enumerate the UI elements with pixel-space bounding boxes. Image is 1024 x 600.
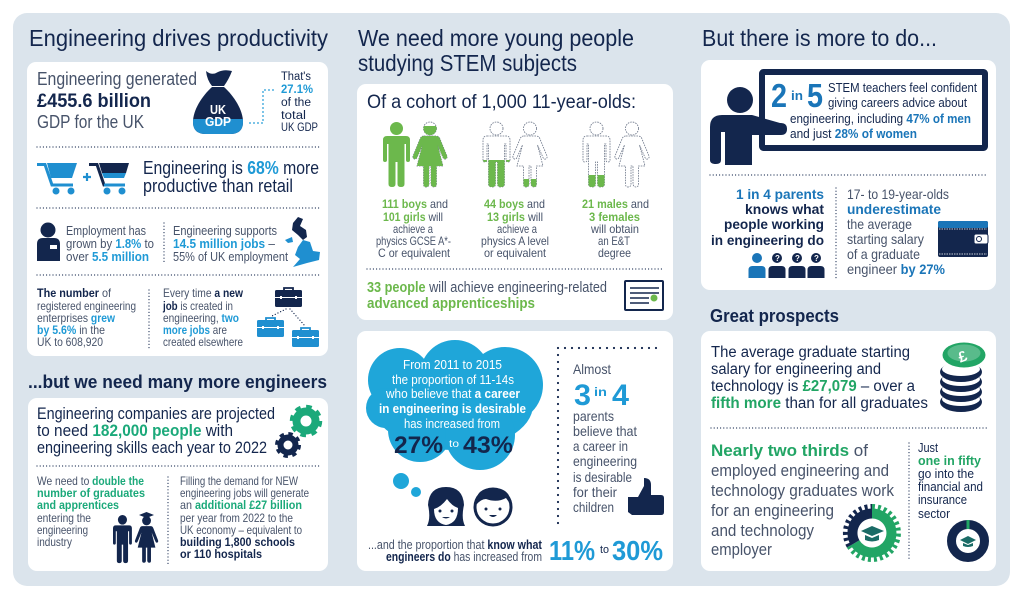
text: jobs supported: 14.5 million jobs – xyxy=(173,236,276,251)
text: 2 in 5 teachers: STEM teachers feel confident xyxy=(828,81,977,95)
icon: girl face xyxy=(427,487,465,526)
text: 1 in 4 parents: knows what xyxy=(745,201,824,217)
icon: coin stack: £ xyxy=(956,347,970,366)
stat: 11% to 30%: 11% xyxy=(549,535,595,566)
icon: four parents: ? xyxy=(814,254,819,263)
text: share of GDP: of the xyxy=(281,97,311,109)
text: cohort heading: Of a cohort of 1,000 11-year-olds: xyxy=(367,91,636,113)
text: registered enterprises xyxy=(37,286,136,349)
icon: boy face xyxy=(475,488,511,525)
text: double graduates xyxy=(37,474,145,549)
text: know what engineers do: engineers do has increased from xyxy=(386,550,542,564)
text: two thirds: technology graduates work xyxy=(711,481,894,500)
text: new jobs multiplier: job is created in xyxy=(162,299,233,313)
text: 3 in 4 parents: 4 xyxy=(612,379,629,412)
text: jobs supported xyxy=(173,223,288,264)
text: 182,000 people: engineering skills each year to 2022 xyxy=(37,438,267,457)
chart: physics GCSE figures xyxy=(383,122,447,187)
chart: physics A level figures xyxy=(483,122,547,187)
chart: degree figures xyxy=(583,122,649,187)
panel: great prospects xyxy=(701,331,996,571)
heading: we need more young people: studying STEM subjects xyxy=(358,50,577,76)
thought cloud: 43% xyxy=(463,432,513,459)
text: new jobs multiplier: created elsewhere xyxy=(163,335,243,349)
text: double graduates: engineering xyxy=(37,523,88,537)
text: 2 in 5 teachers: and just 28% of women xyxy=(790,127,917,141)
chart: gear donut two thirds xyxy=(845,506,898,559)
text: two thirds: employer xyxy=(711,540,772,559)
text: economic value: building 1,800 schools xyxy=(180,535,295,549)
text: share of GDP: total xyxy=(281,110,306,122)
icon: money bag: GDP xyxy=(205,114,231,129)
icon: four parents: ? xyxy=(775,254,780,263)
text: degree stat: an E&T xyxy=(598,234,631,248)
text: apprenticeships: 33 people will achieve engineering-related xyxy=(367,280,607,296)
text: A level stat xyxy=(481,197,549,260)
text: one in fifty: go into the xyxy=(918,467,974,481)
text: share of GDP: That's xyxy=(281,71,311,83)
text: A level stat: 13 girls will xyxy=(487,210,543,224)
text: economic value xyxy=(180,474,309,561)
text: share of GDP: 27.1% xyxy=(281,84,313,96)
icon: money bag xyxy=(193,70,243,134)
text: 3 in 4 parents: engineering xyxy=(573,453,637,469)
thought cloud: 27% xyxy=(394,432,443,459)
text: starting salary: The average graduate starting xyxy=(711,344,910,361)
text: 1 in 4 parents xyxy=(711,186,824,248)
heading: engineering drives productivity: Engineering drives productivity xyxy=(29,25,328,51)
heading: we need more young people: We need more young people xyxy=(358,25,634,51)
text: 2 in 5 teachers: 5 xyxy=(807,77,823,114)
panel: cohort xyxy=(357,84,673,320)
text: one in fifty: insurance xyxy=(918,493,967,507)
icon: shopping carts xyxy=(37,163,129,194)
text: new jobs multiplier: more jobs are xyxy=(163,323,227,337)
text: jobs supported: 55% of UK employment xyxy=(173,249,288,264)
text: 1 in 4 parents: people working xyxy=(724,216,824,232)
text: one in fifty: financial and xyxy=(918,480,983,494)
text: underestimate salary: starting salary xyxy=(847,231,924,247)
text: 2 in 5 teachers: giving careers advice about xyxy=(828,96,967,110)
text: employment growth: over 5.5 million xyxy=(66,249,149,264)
text: GCSE stat xyxy=(376,197,451,260)
text: GCSE stat: C or equivalent xyxy=(378,246,451,260)
text: know what engineers do: ...and the proportion that know what xyxy=(368,538,543,552)
text: 3 in 4 parents: in xyxy=(594,385,607,399)
text: 3 in 4 parents xyxy=(573,361,637,515)
text: economic value: per year from 2022 to the xyxy=(180,511,293,525)
thought cloud xyxy=(366,340,543,497)
thought cloud: who believe that a career xyxy=(385,387,520,401)
text: 3 in 4 parents: a career in xyxy=(573,438,628,454)
text: share of GDP: UK GDP xyxy=(281,122,318,134)
text: new jobs multiplier xyxy=(162,286,244,349)
text: 3 in 4 parents: Almost xyxy=(573,361,611,377)
text: new jobs multiplier: engineering, two xyxy=(163,311,239,325)
text: starting salary: salary for engineering and xyxy=(711,361,881,378)
icon: gears xyxy=(277,407,320,456)
heading: but we need many more engineers: ...but we need many more engineers xyxy=(28,371,327,392)
text: 2 in 5 teachers: 2 xyxy=(771,77,787,114)
text: 3 in 4 parents: believe that xyxy=(573,423,637,439)
text: know what engineers do xyxy=(368,538,543,564)
text: 1 in 4 parents: 1 in 4 parents xyxy=(736,186,824,202)
text: economic value: an additional £27 billion xyxy=(180,498,302,512)
text: registered enterprises: registered engineering xyxy=(37,299,136,313)
panel: productivity xyxy=(27,62,328,356)
text: degree stat: 3 females xyxy=(589,210,640,224)
icon: four parents: ? xyxy=(795,254,800,263)
text: degree stat: degree xyxy=(598,246,631,260)
text: double graduates: entering the xyxy=(37,511,91,525)
text: double graduates: number of graduates xyxy=(37,486,145,500)
text: GDP headline: £455.6 billion xyxy=(37,91,151,112)
text: double graduates: We need to double the xyxy=(37,474,144,488)
icon: four parents xyxy=(748,253,824,278)
text: registered enterprises: by 5.6% in the xyxy=(37,323,105,337)
text: degree stat xyxy=(582,197,649,260)
text: 2 in 5 teachers xyxy=(771,77,977,141)
text: A level stat: or equivalent xyxy=(484,246,547,260)
text: underestimate salary: the average xyxy=(847,216,912,232)
stat: 11% to 30% xyxy=(549,535,663,566)
text: one in fifty: sector xyxy=(918,507,950,521)
text: 182,000 people xyxy=(37,404,275,457)
text: A level stat: physics A level xyxy=(481,234,549,248)
text: apprenticeships: advanced apprenticeships xyxy=(367,296,535,312)
panel: careers advice xyxy=(701,60,996,290)
icon: thumbs up xyxy=(628,478,664,515)
text: GDP headline xyxy=(37,69,197,132)
panel: more engineers xyxy=(28,398,328,571)
text: A level stat: achieve a xyxy=(497,222,537,236)
text: 2 in 5 teachers: in xyxy=(791,88,803,103)
text: apprenticeships xyxy=(367,280,607,312)
text: GDP headline: Engineering generated xyxy=(37,69,197,89)
heading: we need more young people xyxy=(358,25,634,76)
text: one in fifty: one in fifty xyxy=(918,454,981,468)
text: employment growth xyxy=(66,223,154,264)
text: productivity vs retail: Engineering is 68% more xyxy=(143,158,319,178)
thought cloud: the proportion of 11-14s xyxy=(392,373,514,387)
chart: donut one in fifty xyxy=(952,520,984,558)
icon: certificate xyxy=(625,281,663,310)
icon: briefcases xyxy=(257,288,319,347)
text: GCSE stat: achieve a xyxy=(393,222,433,236)
icon: wallet xyxy=(938,221,988,257)
text: A level stat: 44 boys and xyxy=(484,197,545,211)
text: new jobs multiplier: Every time a new xyxy=(163,286,244,300)
text: 1 in 4 parents: in engineering do xyxy=(711,232,824,248)
text: starting salary: fifth more than for all graduates xyxy=(711,395,928,412)
heading: but there is more to do: But there is more to do... xyxy=(702,25,937,51)
text: GCSE stat: physics GCSE A*- xyxy=(376,234,451,248)
text: 3 in 4 parents: is desirable xyxy=(573,469,632,485)
text: double graduates: and apprentices xyxy=(37,498,119,512)
text: 182,000 people: Engineering companies are projected xyxy=(37,404,275,423)
text: share of GDP xyxy=(281,71,318,134)
text: GDP headline: GDP for the UK xyxy=(37,112,144,132)
heading: great prospects: Great prospects xyxy=(710,305,839,326)
text: productivity vs retail: productive than retail xyxy=(143,176,293,196)
stat: 11% to 30%: 30% xyxy=(612,535,663,566)
icon: teacher xyxy=(710,87,787,165)
text: employment growth: grown by 1.8% to xyxy=(66,236,154,251)
text: employment growth: Employment has xyxy=(66,223,146,238)
dotted connector xyxy=(250,90,277,123)
text: two thirds: for an engineering xyxy=(711,501,834,520)
panel: perceptions xyxy=(357,331,673,571)
text: degree stat: will obtain xyxy=(590,222,639,236)
text: economic value: or 110 hospitals xyxy=(180,547,262,561)
text: underestimate salary: of a graduate xyxy=(847,246,920,262)
thought cloud: in engineering is desirable xyxy=(379,402,526,416)
text: one in fifty: Just xyxy=(918,441,938,455)
thought cloud: to xyxy=(449,439,460,450)
text: double graduates: industry xyxy=(37,535,72,549)
text: GCSE stat: 111 boys and xyxy=(382,197,448,211)
text: underestimate salary: 17- to 19-year-olds xyxy=(847,186,949,202)
text: 3 in 4 parents: for their xyxy=(573,484,617,500)
icon: graduates xyxy=(113,512,158,563)
thought cloud: has increased from xyxy=(404,417,500,431)
text: registered enterprises: UK to 608,920 xyxy=(37,335,103,349)
text: two thirds xyxy=(711,441,894,559)
text: registered enterprises: enterprises grew xyxy=(37,311,116,325)
text: two thirds: employed engineering and xyxy=(711,461,889,480)
text: 182,000 people: to need 182,000 people with xyxy=(37,421,233,440)
text: registered enterprises: The number of xyxy=(37,286,112,300)
text: two thirds: Nearly two thirds of xyxy=(711,441,868,460)
text: two thirds: and technology xyxy=(711,521,814,540)
text: economic value: Filling the demand for NEW xyxy=(180,474,299,488)
stat: 11% to 30%: to xyxy=(600,544,609,556)
text: starting salary: technology is £27,079 – over a xyxy=(711,378,915,395)
icon: UK map xyxy=(285,217,320,267)
text: 3 in 4 parents: parents xyxy=(573,408,614,424)
thought cloud: From 2011 to 2015 xyxy=(403,358,502,372)
text: starting salary xyxy=(711,344,928,412)
text: one in fifty xyxy=(918,441,983,521)
text: underestimate salary: engineer by 27% xyxy=(847,261,946,277)
text: economic value: UK economy – equivalent to xyxy=(180,523,302,537)
text: 2 in 5 teachers: engineering, including 47% of men xyxy=(790,112,971,126)
text: productivity vs retail xyxy=(143,158,319,196)
text: economic value: engineering jobs will generate xyxy=(180,486,309,500)
text: 3 in 4 parents: children xyxy=(573,499,614,515)
text: 3 in 4 parents: 3 xyxy=(574,379,591,412)
board xyxy=(762,72,985,148)
text: underestimate salary: underestimate xyxy=(847,201,941,217)
icon: money bag: UK xyxy=(210,102,227,117)
icon: worker xyxy=(37,222,60,261)
text: jobs supported: Engineering supports xyxy=(173,223,277,238)
icon: coin stack xyxy=(940,342,987,412)
text: degree stat: 21 males and xyxy=(582,197,649,211)
text: underestimate salary xyxy=(847,186,949,277)
text: GCSE stat: 101 girls will xyxy=(383,210,443,224)
